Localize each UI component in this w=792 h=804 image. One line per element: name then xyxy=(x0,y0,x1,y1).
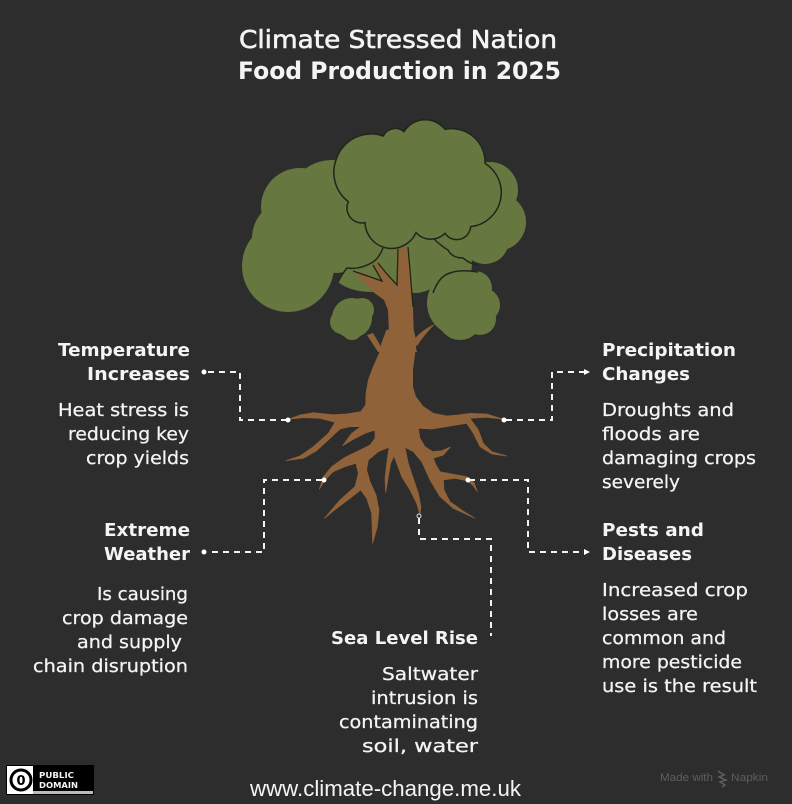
label: temperature increases: reducing key xyxy=(68,424,189,445)
label: pests and diseases: Increased crop xyxy=(602,580,748,601)
label: sea level rise: soil, water xyxy=(362,736,479,757)
label: precipitation changes xyxy=(602,340,756,493)
label: precipitation changes: floods are xyxy=(602,424,700,445)
label: pests and diseases: use is the result xyxy=(602,676,757,697)
connector: pests and diseases xyxy=(466,478,590,555)
label: pests and diseases: Diseases xyxy=(602,544,692,565)
connector: extreme weather xyxy=(202,478,326,554)
lower trunk and roots xyxy=(286,330,507,543)
label: extreme weather: chain disruption xyxy=(33,656,188,677)
label: temperature increases: Increases xyxy=(87,364,190,385)
right small canopy xyxy=(427,270,500,340)
label: extreme weather: Extreme xyxy=(104,520,190,541)
left small canopy xyxy=(330,298,374,340)
label: sea level rise: intrusion is xyxy=(371,688,478,709)
connector: precipitation changes xyxy=(502,369,590,422)
made with napkin: Napkin xyxy=(731,772,768,784)
back left canopy outline xyxy=(338,248,383,282)
label: sea level rise: contaminating xyxy=(339,712,478,733)
title: Food Production in 2025 xyxy=(238,57,561,85)
tree illustration xyxy=(242,120,526,543)
made with napkin xyxy=(660,771,768,787)
label: sea level rise xyxy=(331,628,479,757)
label: temperature increases: Heat stress is xyxy=(58,400,189,421)
public domain badge xyxy=(6,765,94,795)
made with napkin: Made with xyxy=(660,772,713,784)
label: temperature increases xyxy=(58,340,190,469)
trunk and branches xyxy=(353,247,435,352)
public domain badge: 0 xyxy=(16,774,26,789)
website url: www.climate-change.me.uk xyxy=(249,776,522,801)
label: temperature increases: crop yields xyxy=(86,448,189,469)
back foliage xyxy=(242,160,526,312)
front canopy xyxy=(334,120,501,248)
label: precipitation changes: severely xyxy=(602,472,680,493)
label: precipitation changes: Changes xyxy=(602,364,690,385)
label: extreme weather: and supply xyxy=(77,632,182,653)
label: extreme weather: Weather xyxy=(104,544,190,565)
connector: temperature increases xyxy=(202,370,290,422)
public domain badge: PUBLIC xyxy=(39,771,74,780)
label: precipitation changes: Droughts and xyxy=(602,400,734,421)
label: precipitation changes: damaging crops xyxy=(602,448,756,469)
label: sea level rise: Sea Level Rise xyxy=(331,628,478,649)
title: Climate Stressed Nation xyxy=(239,25,557,54)
label: pests and diseases: Pests and xyxy=(602,520,704,541)
label: extreme weather: crop damage xyxy=(62,608,188,629)
label: pests and diseases: more pesticide xyxy=(602,652,742,673)
back right clump outline xyxy=(433,238,478,265)
label: precipitation changes: Precipitation xyxy=(602,340,736,361)
public domain badge: DOMAIN xyxy=(39,781,78,790)
label: pests and diseases: losses are xyxy=(602,604,698,625)
label: temperature increases: Temperature xyxy=(58,340,190,361)
connector: sea level rise xyxy=(417,514,491,636)
label: extreme weather: Is causing xyxy=(97,584,188,605)
label: sea level rise: Saltwater xyxy=(382,664,479,685)
label: extreme weather xyxy=(33,520,190,677)
title xyxy=(238,25,561,85)
label: pests and diseases: common and xyxy=(602,628,726,649)
label: pests and diseases xyxy=(602,520,757,697)
